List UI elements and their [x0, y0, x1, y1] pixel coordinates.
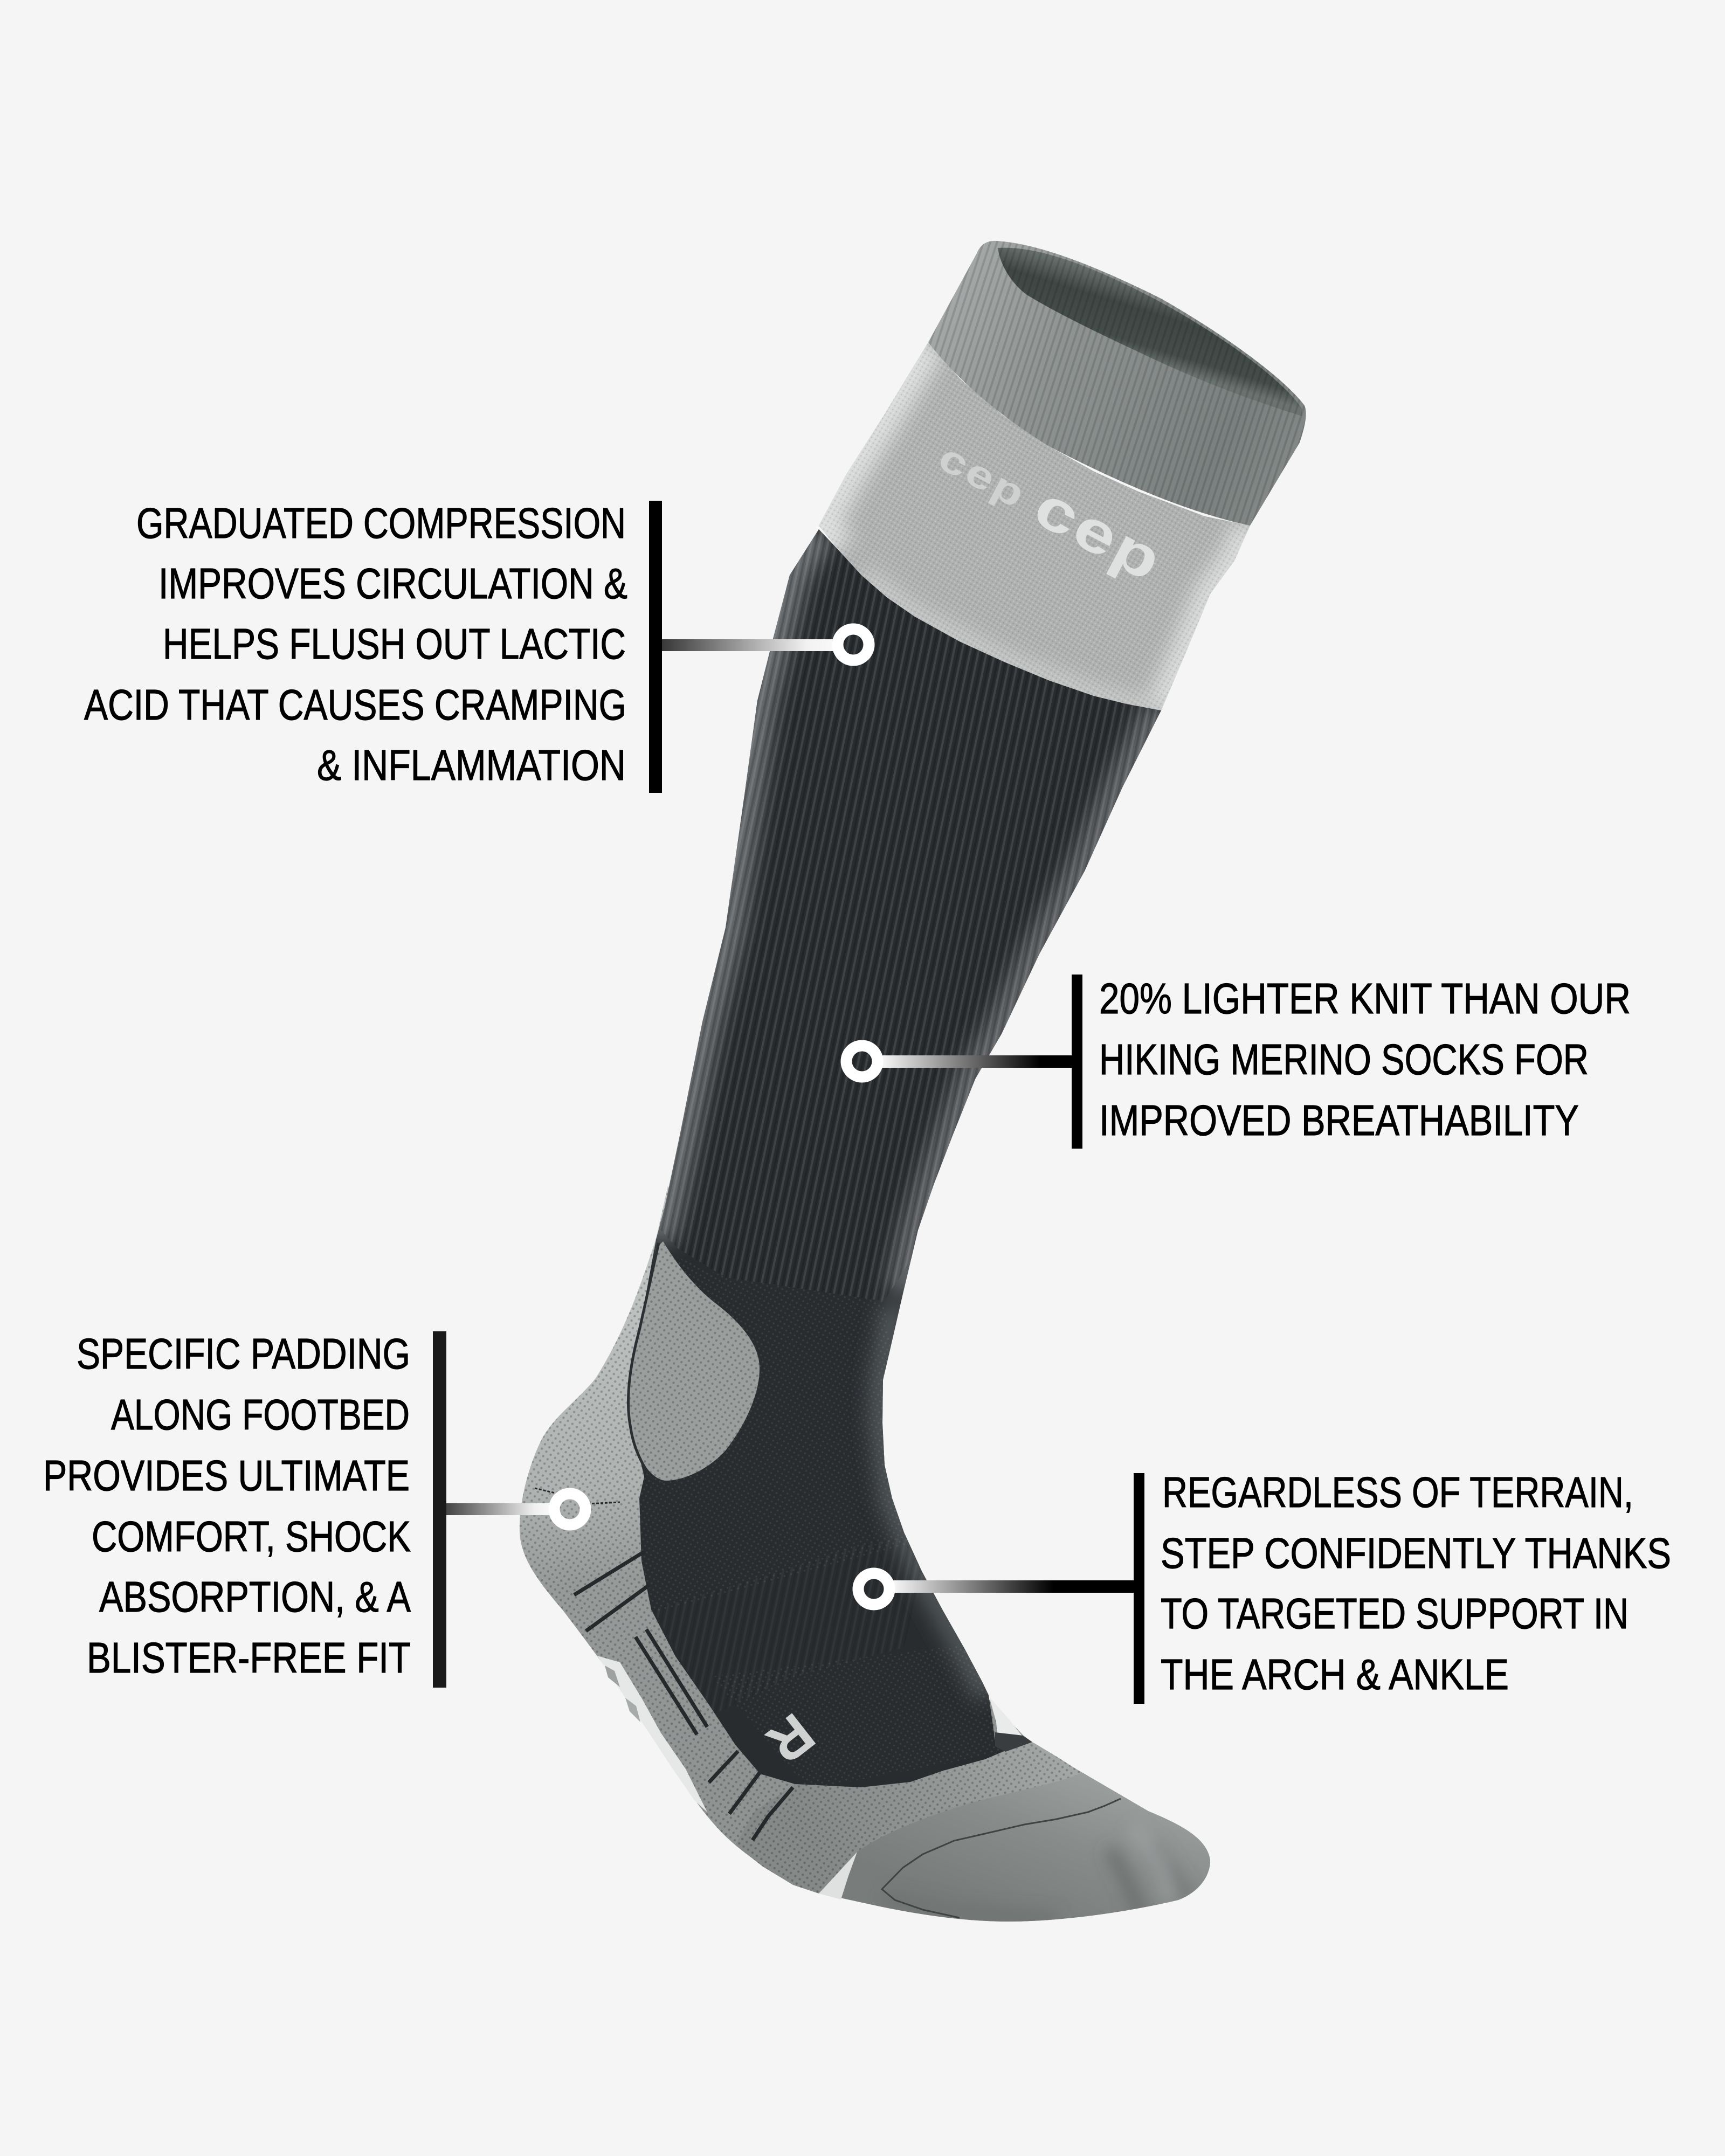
- text block: REGARDLESS OF TERRAIN,: [1162, 1468, 1633, 1516]
- text block: [43, 1330, 411, 1682]
- text block: GRADUATED COMPRESSION: [136, 499, 626, 547]
- connector: [446, 1503, 551, 1515]
- marker ring: [554, 1494, 585, 1525]
- text block: TO TARGETED SUPPORT IN: [1161, 1590, 1629, 1637]
- connector: [662, 639, 834, 651]
- sock illustration: [520, 241, 1306, 1922]
- callout: lighter knit: [846, 975, 1631, 1149]
- text block: [1161, 1468, 1671, 1698]
- text block: ALONG FOOTBED: [111, 1391, 410, 1439]
- sock: foot and heel base: [520, 1186, 1210, 1922]
- text block: COMFORT, SHOCK: [92, 1512, 411, 1560]
- sock: heel seam: [628, 1243, 659, 1480]
- sock: heel patch: [629, 1241, 760, 1481]
- text block: HELPS FLUSH OUT LACTIC: [163, 620, 626, 668]
- text block: HIKING MERINO SOCKS FOR: [1099, 1035, 1589, 1083]
- sock: toe seam: [882, 1799, 1121, 1918]
- sock: cuff opening: [998, 248, 1302, 416]
- logo: cep: cep: [1024, 474, 1174, 595]
- callout: targeted support: [858, 1468, 1671, 1704]
- sock: dark strip above ankle accent: [995, 1732, 1032, 1752]
- marker ring: [838, 629, 869, 660]
- vertical bar: [649, 501, 662, 793]
- sock: forefoot: [735, 1741, 1082, 1894]
- text block: ABSORPTION, & A: [99, 1573, 411, 1621]
- sock: white ankle accent: [989, 1697, 1025, 1744]
- marker ring: [846, 1046, 878, 1077]
- vertical bar: [1072, 975, 1082, 1149]
- callout: graduated compression: [84, 499, 869, 793]
- text block: SPECIFIC PADDING: [77, 1330, 410, 1378]
- sock: toe cap: [830, 1773, 1210, 1922]
- vertical bar: [1134, 1473, 1144, 1704]
- sock: light upper band: [819, 342, 1250, 710]
- callout: specific padding: [43, 1330, 585, 1688]
- connector: [893, 1580, 1134, 1593]
- text block: THE ARCH & ANKLE: [1161, 1650, 1509, 1698]
- sock: dark leg and ankle body: [627, 529, 1161, 1787]
- connector: [881, 1055, 1073, 1068]
- sock: ribbed cuff: [928, 241, 1306, 526]
- sock: heel and sole stripes: [535, 1488, 793, 1840]
- text block: IMPROVED BREATHABILITY: [1099, 1096, 1579, 1144]
- text block: [1099, 975, 1631, 1144]
- vertical bar: [433, 1331, 446, 1688]
- text block: [84, 499, 627, 789]
- sock: right foot letter: R: [755, 1701, 826, 1775]
- sock: white toe accent: [819, 1852, 857, 1899]
- text block: BLISTER-FREE FIT: [87, 1634, 411, 1682]
- marker ring: [858, 1573, 889, 1605]
- sock: toe creases: [884, 1827, 1191, 1919]
- sock: sole logo fading to white: [597, 1656, 707, 1812]
- text block: IMPROVES CIRCULATION &: [158, 559, 627, 607]
- sock: leg edge shading and ribbing: [615, 512, 1186, 1789]
- sock: band edge highlights and logo: [809, 323, 1267, 722]
- text block: & INFLAMMATION: [317, 741, 626, 789]
- sock: forefoot knit texture: [735, 1741, 1082, 1894]
- text block: 20% LIGHTER KNIT THAN OUR: [1099, 975, 1631, 1022]
- sock: faint secondary logo: cep: [932, 435, 1034, 517]
- infographic canvas: [45, 240, 1670, 1922]
- text block: PROVIDES ULTIMATE: [43, 1452, 410, 1499]
- text block: ACID THAT CAUSES CRAMPING: [84, 681, 626, 729]
